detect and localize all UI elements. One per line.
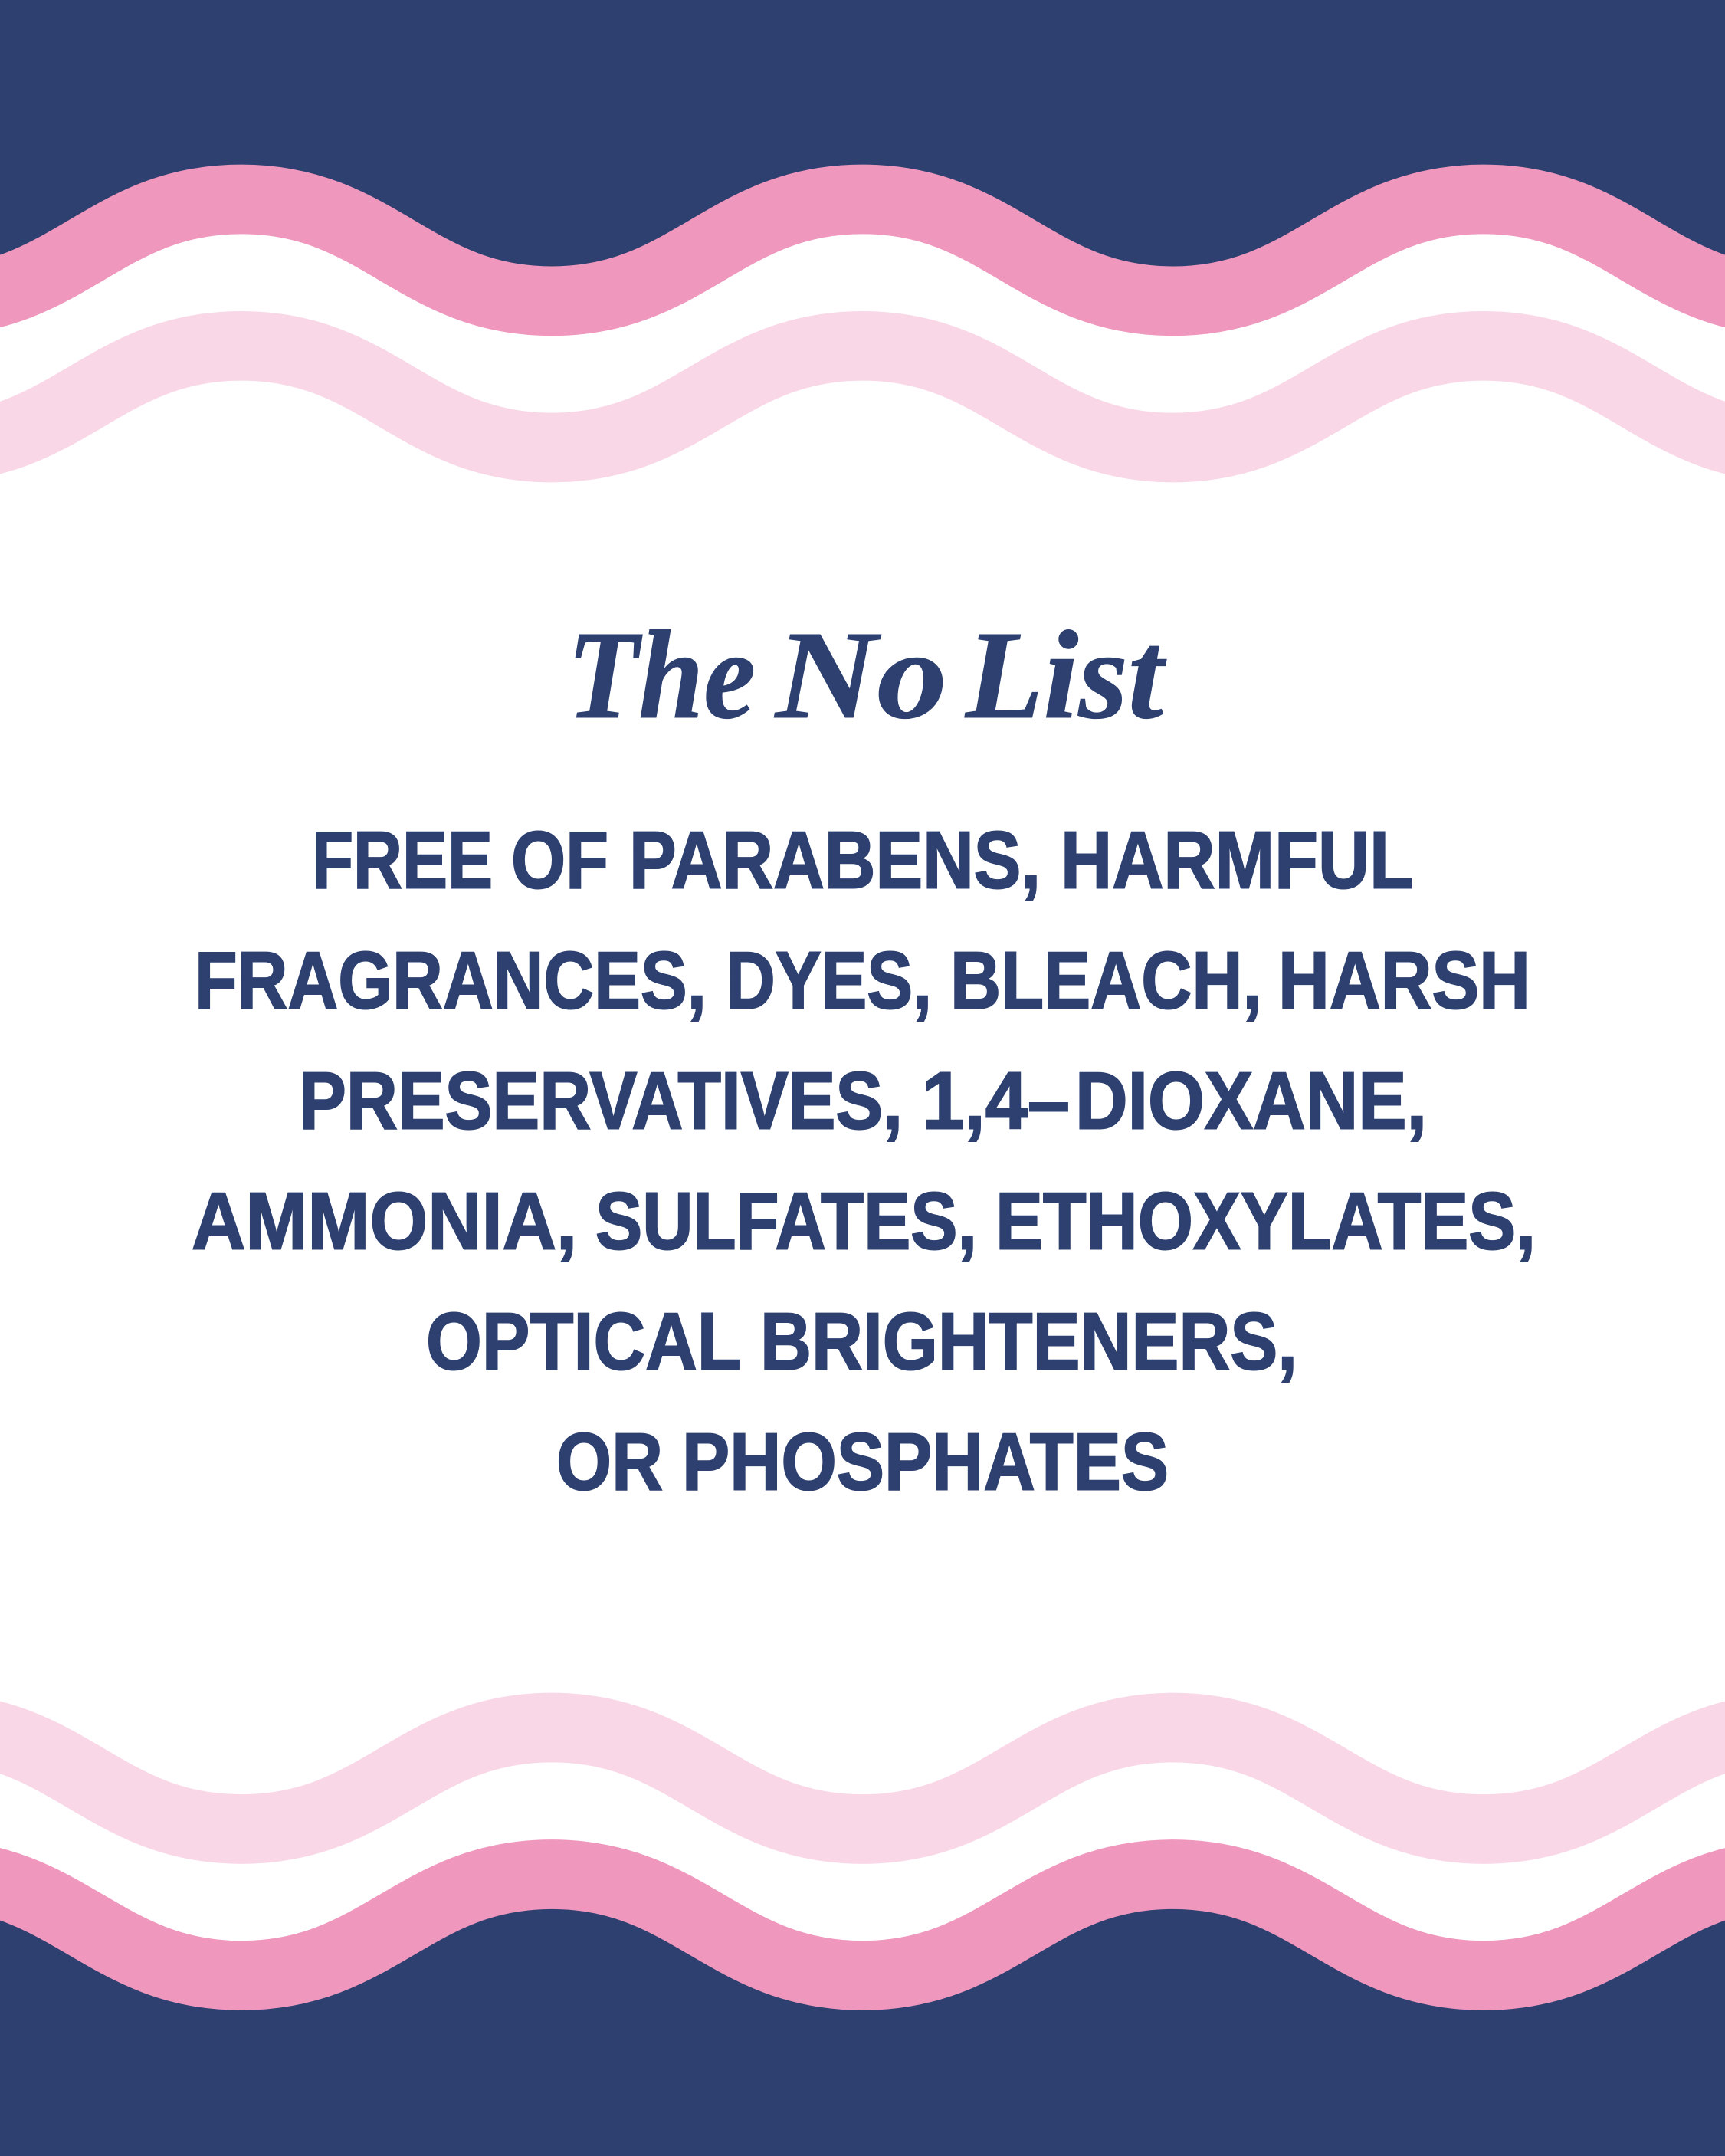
text line 4: ETHOXYLATES, — [995, 1176, 1536, 1267]
list of excluded ingredients — [192, 815, 1536, 1508]
text line 5: OPTICAL — [426, 1297, 741, 1387]
text line 1: OF — [511, 815, 608, 905]
text line 2: FRAGRANCES, — [195, 936, 707, 1026]
text line 3: DIOXANE, — [1075, 1055, 1427, 1146]
top wave decoration — [0, 0, 1725, 448]
text line 3 — [299, 1055, 1427, 1146]
bottom wave decoration — [0, 1728, 1725, 2156]
top pink wave band — [0, 199, 1725, 301]
text line 1: PARABENS, — [629, 815, 1041, 905]
text line 4: SULFATES, — [595, 1176, 977, 1267]
bottom navy wave block — [0, 1875, 1725, 2156]
text line 3: 1,4– — [922, 1055, 1070, 1146]
title: The — [567, 605, 756, 745]
text line 2: BLEACH, — [950, 936, 1262, 1026]
text line 2 — [195, 936, 1530, 1026]
text line 6: OR — [556, 1417, 663, 1508]
title: List — [964, 605, 1166, 745]
text line 1 — [312, 815, 1413, 905]
top navy wave block — [0, 0, 1725, 301]
title: No — [774, 605, 947, 745]
text line 4: AMMONIA, — [192, 1176, 577, 1267]
text line 2: HARSH — [1278, 936, 1530, 1026]
text line 3: PRESERVATIVES, — [299, 1055, 903, 1146]
text line 6: PHOSPHATES — [682, 1417, 1169, 1508]
top pale pink wave band — [0, 346, 1725, 448]
text line 4 — [192, 1176, 1536, 1267]
text line 2: DYES, — [726, 936, 932, 1026]
text line 1: HARMFUL — [1061, 815, 1413, 905]
bottom pink wave band — [0, 1875, 1725, 1976]
text line 5 — [426, 1297, 1297, 1387]
title — [567, 605, 1166, 745]
text line 1: FREE — [312, 815, 493, 905]
text line 5: BRIGHTENERS, — [760, 1297, 1297, 1387]
bottom pale pink wave band — [0, 1728, 1725, 1829]
